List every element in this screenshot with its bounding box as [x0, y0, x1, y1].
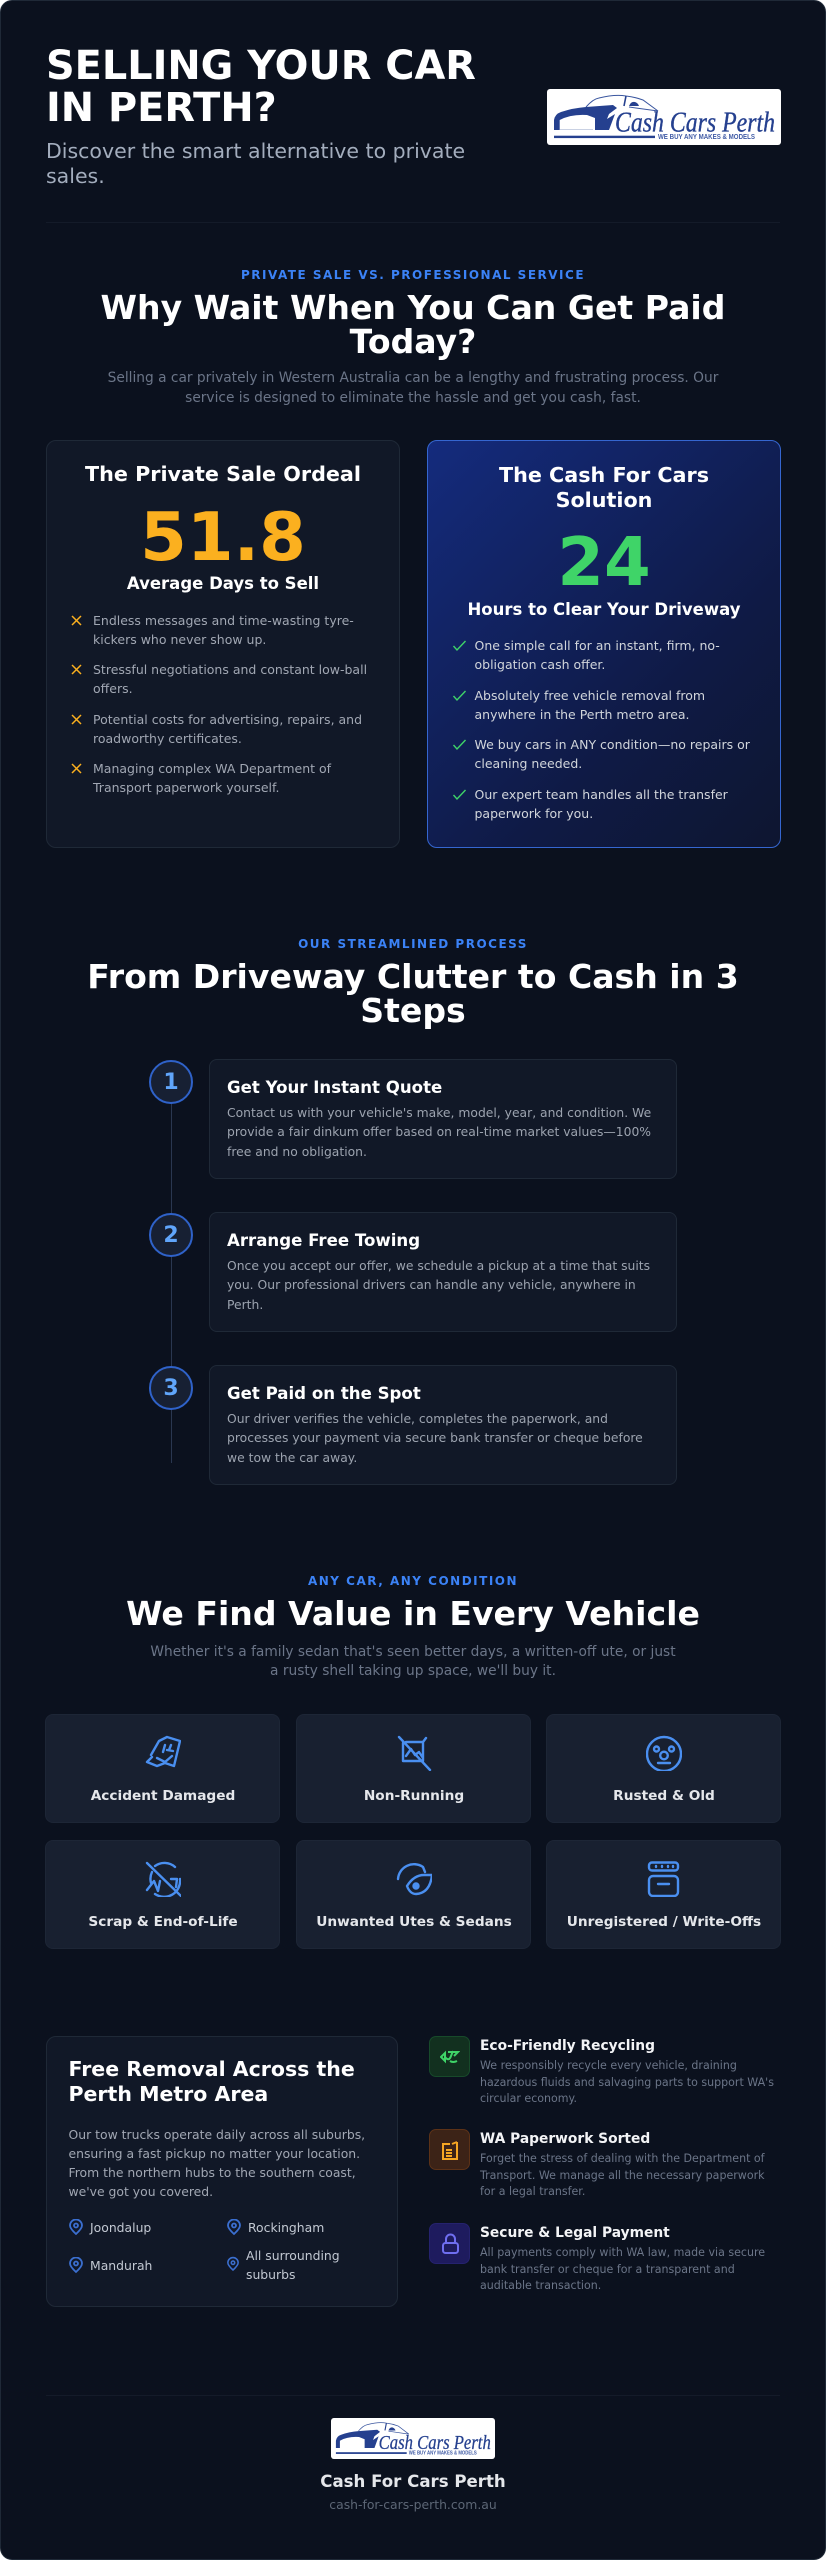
section intro: vehicles: Whether it's a family sedan that's seen better days, a written-off ute, or just	[150, 1644, 676, 1660]
step 3 text: Our driver verifies the vehicle, completes the paperwork, and	[227, 1412, 608, 1426]
step 3 text: processes your payment via secure bank transfer or cheque before	[227, 1431, 643, 1445]
stat: 24: 24	[557, 523, 651, 601]
drawback 4: Transport paperwork yourself.	[93, 780, 279, 795]
section heading: comparison: Why Wait When You Can Get Paid	[101, 288, 725, 327]
footer divider	[46, 2395, 780, 2396]
logo: Cash Cars Perth	[547, 89, 781, 145]
section intro: comparison: Selling a car privately in Western Australia can be a lengthy and frustrating process. Our	[108, 370, 718, 386]
drawback 1: kickers who never show up.	[93, 632, 266, 647]
padlock glyph	[441, 2233, 460, 2255]
step 2 number: 2	[163, 1223, 179, 1248]
feature: WA paperwork sorted	[480, 2129, 780, 2205]
pin icon	[68, 2256, 82, 2272]
feature: eco-friendly recycling	[480, 2036, 780, 2112]
location: Rockingham	[227, 2219, 324, 2235]
text: We responsibly recycle every vehicle, draining	[480, 2059, 737, 2072]
section label: comparison: PRIVATE SALE VS. PROFESSIONAL SERVICE	[241, 268, 585, 282]
panel title	[499, 462, 709, 512]
card: unwanted utes and sedans	[296, 1840, 531, 1949]
benefit 1: obligation cash offer.	[474, 657, 605, 672]
cross icon	[72, 714, 82, 724]
document glyph	[441, 2141, 460, 2160]
pin icon	[69, 2219, 83, 2235]
header title: IN PERTH?	[46, 84, 277, 130]
name: All surrounding	[246, 2248, 340, 2263]
coverage text: Our tow trucks operate daily across all suburbs,	[68, 2126, 365, 2142]
coverage text: From the northern hubs to the southern coast,	[68, 2165, 356, 2180]
benefit 4: Our expert team handles all the transfer	[474, 786, 728, 802]
step 1 number: 1	[163, 1070, 179, 1095]
label: Unregistered / Write-Offs	[567, 1914, 761, 1930]
cross icon	[72, 664, 82, 674]
icon: accident	[146, 1736, 181, 1768]
header title: SELLING YOUR CAR	[46, 42, 476, 88]
text: Forget the stress of dealing with the Department of	[480, 2152, 765, 2165]
icon: non-running	[398, 1736, 432, 1771]
section intro: vehicles: a rusty shell taking up space, we'll buy it.	[270, 1663, 556, 1679]
stat label: Hours to Clear Your Driveway	[468, 600, 740, 619]
drawback 2	[93, 662, 367, 696]
step 1 text: provide a fair dinkum offer based on real-time market values—100%	[227, 1125, 651, 1139]
drawback 3: roadworthy certificates.	[93, 731, 242, 746]
drawback 2: offers.	[93, 681, 133, 696]
check icon	[453, 790, 466, 800]
pin icon	[226, 2256, 238, 2272]
icon: unwanted	[396, 1863, 432, 1896]
header subtitle: sales.	[46, 164, 105, 188]
drawback 4	[92, 761, 332, 795]
step 1 text: free and no obligation.	[227, 1145, 367, 1159]
panel title: The Private Sale Ordeal	[85, 462, 361, 486]
section intro: comparison	[108, 370, 718, 406]
title: Eco-Friendly Recycling	[480, 2038, 655, 2054]
coverage heading	[68, 2056, 355, 2106]
benefit 2: anywhere in the Perth metro area.	[474, 707, 690, 722]
footer website: cash-for-cars-perth.com.au	[329, 2497, 497, 2512]
step 3 number: 3	[163, 1376, 179, 1401]
text: bank transfer or cheque for a transparent and	[480, 2263, 735, 2276]
step 1 text: Contact us with your vehicle's make, model, year, and condition. We	[227, 1106, 651, 1120]
footer company name: Cash For Cars Perth	[320, 2472, 506, 2490]
header divider	[46, 222, 780, 223]
name: Joondalup	[90, 2220, 151, 2234]
pin icon	[226, 2218, 240, 2234]
footer logo	[331, 2418, 495, 2459]
coverage heading: Free Removal Across the	[68, 2056, 355, 2080]
panel: cash for cars solution	[427, 440, 781, 848]
benefit 3: cleaning needed.	[474, 756, 582, 771]
cross icon	[72, 616, 82, 626]
header subtitle	[46, 138, 465, 188]
step 1 number	[149, 1060, 193, 1104]
list: drawbacks	[72, 612, 367, 795]
check icon	[453, 740, 466, 750]
feature icon: paperwork	[429, 2129, 470, 2170]
step 2 text	[227, 1259, 650, 1312]
step 3 title: Get Paid on the Spot	[227, 1384, 421, 1403]
icon: rusted	[646, 1736, 682, 1771]
drawback 3	[93, 712, 362, 746]
card: unregistered and write-offs	[546, 1840, 781, 1949]
benefit 1: One simple call for an instant, firm, no-	[474, 638, 720, 653]
icon: scrap	[146, 1862, 181, 1897]
text	[480, 2151, 765, 2201]
coverage text: ensuring a fast pickup no matter your location.	[68, 2146, 360, 2161]
check icon	[453, 640, 466, 651]
name: Rockingham	[248, 2220, 324, 2234]
footer logo: WE BUY ANY MAKES & MODELS	[409, 2451, 477, 2457]
coverage text	[68, 2126, 365, 2199]
drawback 1	[93, 612, 354, 647]
section intro: comparison: service is designed to eliminate the hassle and get you cash, fast.	[185, 390, 641, 406]
step 3 number	[149, 1366, 193, 1410]
text: hazardous fluids and salvaging parts to support WA's	[480, 2076, 774, 2089]
text: Transport. We manage all the necessary paperwork	[480, 2169, 765, 2182]
step 2 text: Perth.	[227, 1298, 263, 1312]
section label: vehicles: ANY CAR, ANY CONDITION	[308, 1574, 518, 1588]
header title	[46, 42, 476, 130]
location: Mandurah	[68, 2256, 208, 2280]
card: scrap and end-of-life	[45, 1840, 280, 1949]
stat label: Average Days to Sell	[127, 574, 319, 593]
name: suburbs	[246, 2267, 295, 2282]
step 3 text: we tow the car away.	[227, 1451, 357, 1465]
panel title: Solution	[556, 488, 652, 512]
feature: secure and legal payment	[480, 2223, 780, 2299]
drawback 1: Endless messages and time-wasting tyre-	[93, 612, 354, 628]
feature icon: secure payment	[429, 2223, 470, 2264]
list: benefits	[453, 638, 750, 821]
panel: coverage area	[46, 2036, 398, 2307]
logo: Cash Cars Perth: WE BUY ANY MAKES & MODELS	[658, 134, 755, 141]
section heading: process	[87, 957, 739, 1030]
card: accident damaged	[45, 1714, 280, 1823]
timeline line	[171, 1101, 172, 1463]
step 2 text: you. Our professional drivers can handle any vehicle, anywhere in	[227, 1278, 636, 1292]
section heading: comparison: Today?	[350, 322, 476, 360]
text: auditable transaction.	[480, 2279, 601, 2292]
drawback 3: Potential costs for advertising, repairs, and	[93, 712, 362, 726]
recycle glyph	[440, 2049, 460, 2065]
benefit 3	[474, 737, 750, 771]
benefit 4	[474, 786, 728, 821]
text: All payments comply with WA law, made via secure	[480, 2246, 765, 2259]
section heading: comparison	[101, 288, 725, 360]
benefit 3: We buy cars in ANY condition—no repairs or	[474, 737, 750, 752]
title: Secure & Legal Payment	[480, 2225, 670, 2241]
check icon	[453, 690, 466, 701]
label: Accident Damaged	[91, 1788, 235, 1804]
step 1 card	[209, 1059, 677, 1179]
section heading: vehicles: We Find Value in Every Vehicle	[126, 1594, 700, 1633]
label: Rusted & Old	[613, 1788, 715, 1804]
label: Non-Running	[364, 1788, 464, 1804]
name	[246, 2246, 340, 2285]
section label: process: OUR STREAMLINED PROCESS	[298, 937, 528, 951]
text	[480, 2058, 774, 2108]
panel: private sale	[46, 440, 400, 848]
drawback 4: Managing complex WA Department of	[93, 761, 331, 776]
section heading: process: From Driveway Clutter to Cash in 3	[87, 957, 739, 996]
stat: 51.8: 51.8	[140, 498, 306, 576]
step 2 number	[149, 1213, 193, 1257]
text: circular economy.	[480, 2092, 577, 2105]
benefit 4: paperwork for you.	[474, 806, 593, 821]
icon: unregistered	[648, 1861, 680, 1897]
benefit 1	[474, 638, 720, 672]
step 2 card	[209, 1212, 677, 1332]
step 1 title: Get Your Instant Quote	[227, 1078, 442, 1097]
header subtitle: Discover the smart alternative to private	[46, 138, 465, 162]
location: Joondalup	[69, 2219, 151, 2235]
step 2 text: Once you accept our offer, we schedule a pickup at a time that suits	[227, 1259, 650, 1273]
cross icon	[72, 764, 82, 774]
label: Scrap & End-of-Life	[88, 1914, 238, 1930]
card: non-running	[296, 1714, 531, 1823]
title: WA Paperwork Sorted	[480, 2131, 650, 2147]
step 1 text	[227, 1106, 651, 1159]
step 2 title: Arrange Free Towing	[227, 1231, 420, 1250]
section heading: process: Steps	[360, 990, 466, 1030]
panel title: The Cash For Cars	[499, 462, 709, 486]
text	[480, 2245, 765, 2295]
location: All surrounding suburbs	[226, 2246, 376, 2286]
coverage text: we've got you covered.	[68, 2184, 213, 2199]
text: for a legal transfer.	[480, 2185, 585, 2198]
feature icon: recycling	[429, 2036, 470, 2077]
step 3 text	[227, 1412, 643, 1465]
card: rusted and old	[546, 1714, 781, 1823]
benefit 2	[474, 688, 705, 722]
name: Mandurah	[90, 2258, 152, 2272]
drawback 2: Stressful negotiations and constant low-ball	[93, 662, 367, 677]
coverage heading: Perth Metro Area	[68, 2082, 268, 2106]
step 3 card	[209, 1365, 677, 1485]
section intro: vehicles	[150, 1644, 676, 1679]
label: Unwanted Utes & Sedans	[316, 1914, 512, 1930]
benefit 2: Absolutely free vehicle removal from	[474, 688, 705, 702]
